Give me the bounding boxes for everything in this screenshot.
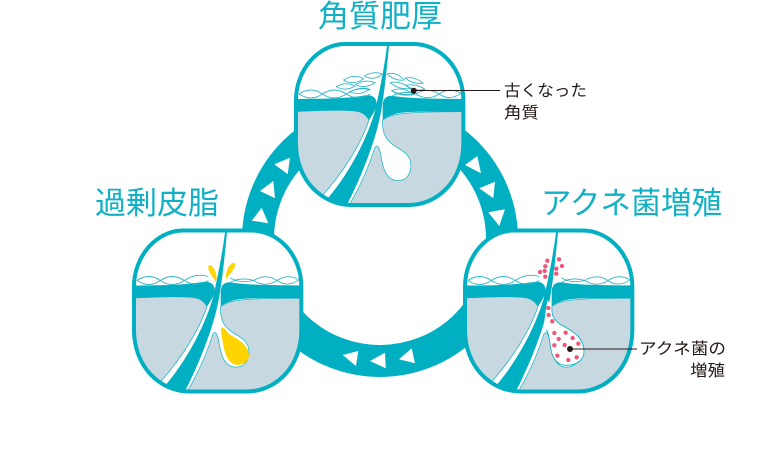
arrows: left arc (252, 158, 290, 223)
arrows: right arc (465, 156, 505, 226)
arrows: bottom arc (343, 348, 415, 368)
callout: acne bacteria: アクネ菌の (639, 340, 726, 358)
panel: excess sebum (133, 230, 303, 396)
callout: old stratum corneum: 角質 (504, 104, 539, 122)
heading: right: アクネ菌増殖 (541, 186, 722, 221)
cycle ring (258, 117, 502, 361)
panel: acne bacteria growth (464, 230, 634, 396)
panel: thickened stratum corneum (295, 44, 465, 210)
heading: top: 角質肥厚 (318, 0, 442, 34)
sebum in gland and pore (208, 263, 249, 365)
callout: old stratum corneum: 古くなった (504, 82, 587, 100)
enlarged gland with acne bacteria (538, 257, 584, 365)
old skin flakes (336, 73, 425, 95)
callout: old stratum corneum (411, 82, 587, 122)
callout: acne bacteria (567, 340, 726, 380)
callout: acne bacteria: 増殖 (690, 362, 725, 380)
heading: left: 過剰皮脂 (95, 186, 219, 221)
